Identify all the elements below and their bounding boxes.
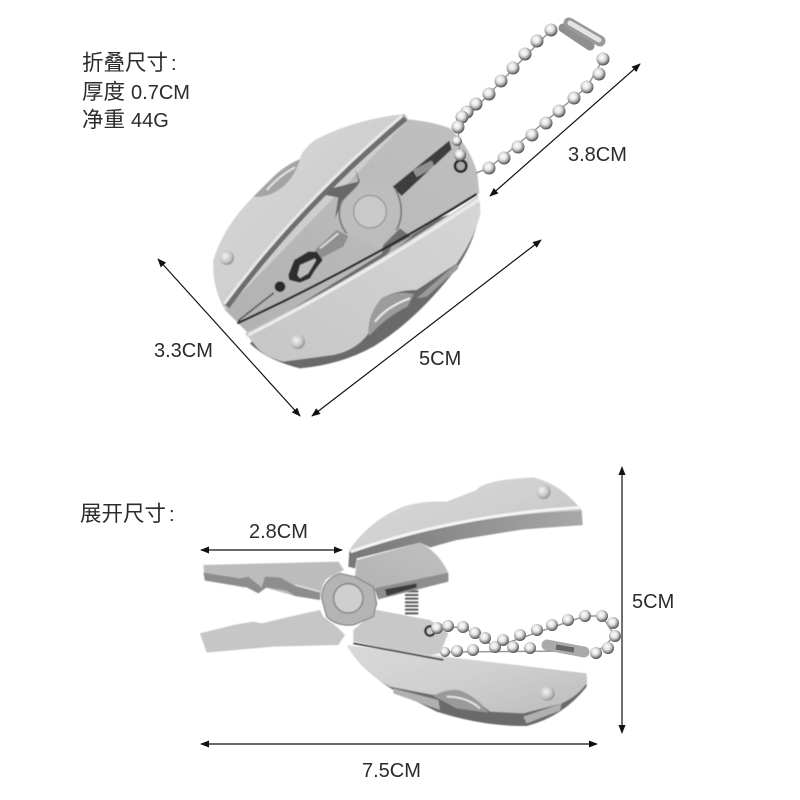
unfolded upper scale highlight: [351, 507, 581, 552]
unfolded upper handle: [355, 543, 448, 599]
unfolded lower handle: [353, 610, 448, 657]
unfolded tool: [200, 477, 587, 726]
arrow: 5CM vertical: [621, 467, 623, 733]
folded plier body: [225, 119, 479, 335]
folded specifications text: 厚度 0.7CM: [82, 80, 190, 104]
unfolded pivot boss: [322, 573, 377, 625]
unfolded upper handle edge: [374, 573, 448, 599]
unfolded upper scale: [348, 477, 583, 568]
label: 3.8CM: 3.8CM: [568, 144, 627, 166]
folded strip upper: [226, 117, 405, 306]
unfolded ball chain: [431, 610, 621, 659]
unfolded upper scale edge: [348, 511, 583, 568]
label: 5CM folded: 5CM: [419, 348, 461, 370]
folded upper scale: [213, 114, 408, 310]
folded ball chain: [452, 23, 610, 174]
label: 3.3CM: 3.3CM: [154, 340, 213, 362]
folded chain clasp: [563, 23, 600, 46]
folded scale highlight: [248, 199, 479, 335]
folded pivot boss: [341, 184, 401, 250]
label: 5CM vertical: 5CM: [632, 591, 674, 613]
folded knife blade left: [252, 158, 302, 198]
folded specifications text: 净重 44G: [82, 108, 169, 132]
folded specifications text: 折叠尺寸:: [82, 51, 177, 75]
unfolded spring slot: [385, 583, 417, 596]
unfolded lower jaw: [200, 610, 345, 653]
unfolded spring: [392, 587, 432, 615]
label: 2.8CM: 2.8CM: [249, 521, 308, 543]
folded rivets: [219, 250, 234, 265]
unfolded upper jaw: [203, 562, 344, 600]
unfolded chain ring: [425, 626, 435, 636]
folded pivot pin: [354, 195, 386, 228]
folded dark under layer: [250, 203, 480, 368]
arrow: 3.8CM: [490, 64, 640, 196]
arrow: 3.3CM: [158, 259, 300, 416]
heading: unfolded size: 展开尺寸:: [80, 502, 175, 526]
folded jaw throat: [315, 230, 348, 258]
folded specifications text: [82, 51, 190, 132]
unfolded lower scale: [347, 645, 587, 713]
unfolded lower knife inset: [433, 690, 488, 713]
unfolded upper jaw teeth: [203, 573, 320, 600]
folded gap upper right: [393, 141, 452, 196]
arrow: 5CM folded: [312, 240, 541, 416]
unfolded dark under layer: [352, 652, 587, 726]
folded gap upper centre: [325, 168, 360, 218]
folded gap lower centre: [382, 228, 413, 262]
unfolded chain clasp: [547, 645, 584, 652]
folded plier teeth: [288, 252, 323, 283]
arrow: 2.8CM: [201, 549, 342, 551]
label: 7.5CM: 7.5CM: [362, 760, 421, 782]
folded scale shadow line: [237, 194, 477, 323]
unfolded lower scale edge: [353, 643, 443, 660]
unfolded pivot pin: [334, 584, 363, 613]
arrow: 7.5CM: [201, 743, 597, 745]
unfolded rivets: [536, 484, 551, 499]
folded lower scale: [245, 195, 481, 362]
folded tool: [213, 114, 481, 368]
folded lower knife inset: [368, 293, 414, 335]
folded spring: [415, 164, 433, 173]
